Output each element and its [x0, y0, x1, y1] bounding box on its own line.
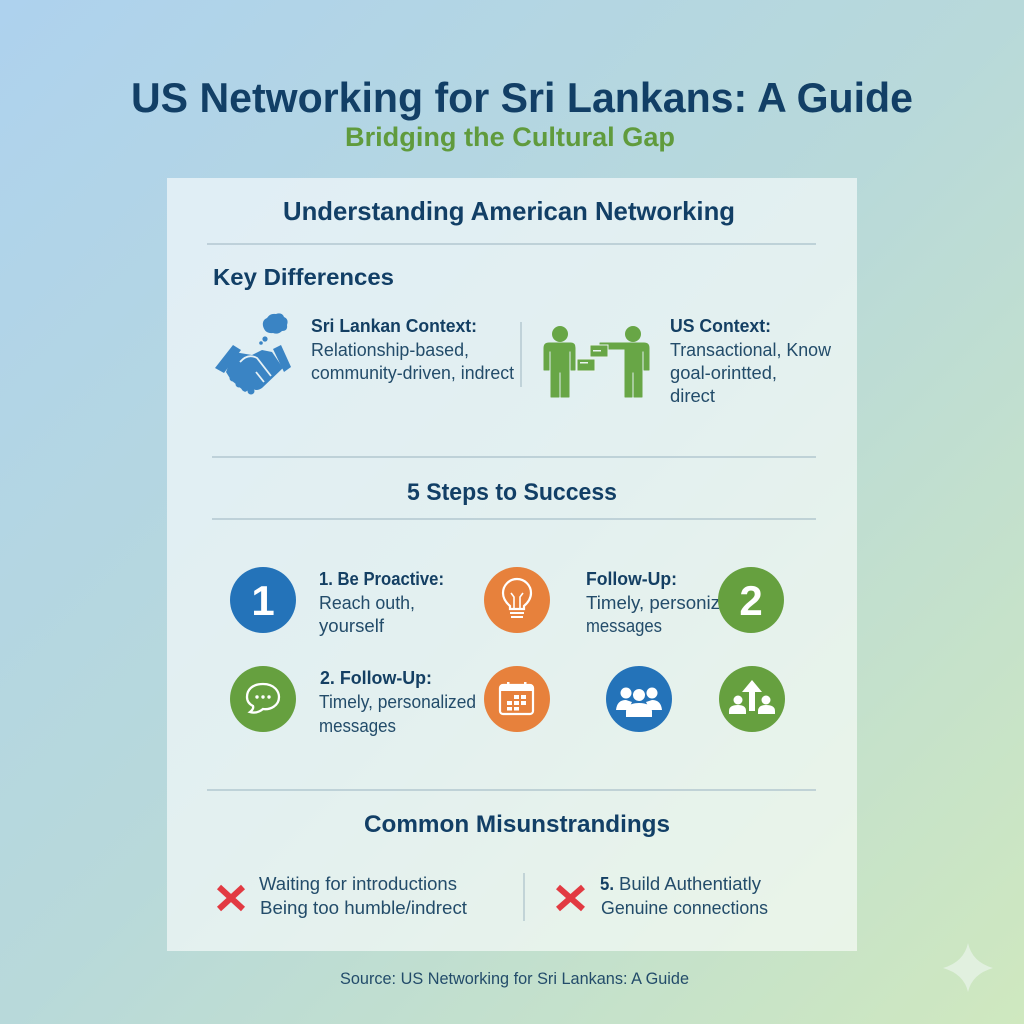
text: us context	[670, 316, 832, 406]
text: misunderstandings left: Being too humble/indrect	[260, 897, 467, 918]
text: us context: Transactional, Know	[670, 339, 832, 360]
text: us context: goal-orintted,	[670, 362, 777, 383]
text: follow-up: Follow-Up:	[586, 569, 677, 589]
text: misunderstandings right: 5.	[600, 874, 614, 894]
text: sri lankan context: Relationship-based,	[311, 339, 469, 360]
text: follow-up	[586, 569, 720, 636]
text: misunderstandings left	[259, 873, 467, 918]
text: misunderstandings right	[600, 873, 768, 918]
text: step 2 follow-up: Timely, personalized	[319, 691, 476, 712]
text: misunderstandings left: Waiting for introductions	[259, 873, 457, 894]
icon: handshake with thought bubble	[215, 313, 291, 394]
icon: red cross left	[219, 887, 243, 909]
icon: lightbulb	[484, 567, 550, 633]
text: step 2 follow-up: 2. Follow-Up:	[320, 668, 432, 688]
text: step 1 be proactive	[319, 569, 444, 636]
text: sri lankan context: community-driven, indrect	[311, 362, 514, 383]
text: step 2 follow-up: messages	[319, 715, 396, 736]
icon: number 2	[718, 567, 784, 633]
icon: number 1: 1	[251, 577, 275, 624]
title: US Networking for Sri Lankans: A Guide	[131, 74, 913, 121]
text: sri lankan context: Sri Lankan Context:	[311, 316, 477, 336]
text: step 1 be proactive: 1. Be Proactive:	[319, 569, 444, 589]
text: sri lankan context	[311, 316, 514, 383]
text: us context: US Context:	[670, 316, 771, 336]
icon: two people exchanging cards	[544, 326, 649, 397]
subtitle: Bridging the Cultural Gap	[345, 122, 675, 152]
text: us context: direct	[670, 385, 715, 406]
source note: Source: US Networking for Sri Lankans: A Guide	[340, 970, 689, 988]
icon: sparkle	[943, 943, 993, 992]
text: follow-up: Timely, personiz	[586, 592, 720, 613]
icon: group of people	[606, 666, 672, 732]
text: step 1 be proactive: yourself	[319, 615, 385, 636]
text: misunderstandings right: Build Authentiatly	[619, 873, 762, 894]
text: step 1 be proactive: Reach outh,	[319, 592, 415, 613]
text: step 2 follow-up	[319, 668, 476, 736]
icon: number 2: 2	[739, 577, 763, 624]
icon: people with up arrow	[719, 666, 785, 732]
icon: calendar	[484, 666, 550, 732]
icon: red cross right	[558, 887, 583, 909]
heading: key differences: Key Differences	[213, 264, 394, 290]
icon: number 1	[230, 567, 296, 633]
heading: common misunderstandings: Common Misunstrandings	[364, 811, 670, 838]
text: misunderstandings right: Genuine connections	[601, 897, 768, 918]
heading: understanding american networking: Understanding American Networking	[283, 196, 735, 226]
panel: main card	[167, 178, 857, 951]
heading: 5 steps to success: 5 Steps to Success	[407, 479, 617, 506]
text: follow-up: messages	[586, 615, 662, 636]
icon: speech bubble	[230, 666, 296, 732]
